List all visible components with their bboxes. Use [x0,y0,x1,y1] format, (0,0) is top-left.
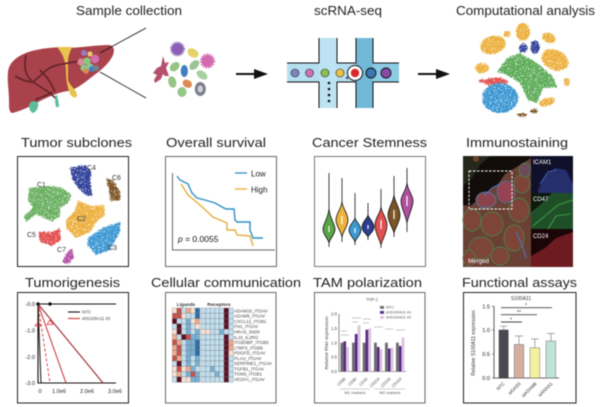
panel: cancer stemness violin plot [314,156,426,266]
panel: tumor subclones tSNE: C7 [57,247,66,254]
panel: cellular communication heatmap: SERPINE1_ITGAV [234,361,272,366]
panel: cellular communication heatmap: HRAS_INSR [234,330,261,334]
chart: overview tSNE [475,23,572,117]
panel: TAM polarization bar chart: CD163 [390,376,403,389]
panel: cellular communication heatmap: CXCL12_ITGB1 [234,319,267,324]
dashed inset box [469,171,512,209]
panel: functional assays bar chart: Relative S100A11 expression [471,310,477,376]
panel: functional assays bar chart [464,292,576,403]
panel: TAM polarization bar chart: shS100A11 #2 [386,314,411,320]
title: Immunostaining: Immunostaining [466,135,568,150]
panel: TAM polarization bar chart: 1.0 [331,340,338,346]
panel: tumor subclones tSNE: C6 [112,175,121,182]
panel: TAM polarization bar chart: THP-1 [366,297,379,302]
panel: TAM polarization bar chart: 1.5 [331,326,338,331]
panel: tumorigenesis limiting dilution chart: -0.0 [25,302,35,308]
panel: cellular communication heatmap: TGM2_ITGB1 [234,372,263,377]
panel: tumor subclones tSNE: C4 [87,165,96,172]
panel: overall survival chart: Low [251,170,266,178]
panel: TAM polarization bar chart: CD206 [379,376,392,389]
title: Cellular communication: Cellular communication [151,275,301,290]
panel: functional assays bar chart: S100A11 [511,296,531,302]
panel: TAM polarization bar chart: M1 markers [344,390,366,395]
panel: functional assays bar chart: siGAS6 [507,381,522,396]
panel: functional assays bar chart: * [510,318,512,324]
title: TAM polarization: TAM polarization [313,275,422,290]
panel: immunostaining micrographs: Merged [468,258,490,265]
panel: functional assays bar chart: 1.5 [482,304,490,310]
panel: TAM polarization bar chart: CD86 [336,376,347,387]
icon: liver with tumour [8,45,114,113]
panel: ICAM1: ICAM1 [533,160,552,166]
panel: cellular communication heatmap: Ligands [177,302,196,308]
panel: cellular communication heatmap: Receptors [207,302,231,308]
panel: TAM polarization bar chart: 0.0 [331,369,338,374]
panel: tumor subclones tSNE: C5 [27,232,36,239]
panel: overall survival chart: p = 0.0055 [177,234,219,244]
panel: functional assays bar chart: siADAM8 [521,381,538,398]
panel: TAM polarization bar chart [314,292,425,403]
panel: functional assays bar chart: * [525,303,527,309]
panel: tumor subclones tSNE: C2 [77,216,86,223]
panel: functional assays bar chart: siANXA1 [537,381,554,398]
title: Cancer Stemness: Cancer Stemness [312,135,428,150]
panel: immunostaining micrographs [463,156,573,267]
panel: tumorigenesis limiting dilution chart [18,292,128,403]
panel: tumorigenesis limiting dilution chart: NTC [82,310,91,314]
panel: tumorigenesis limiting dilution chart: 1.0e6 [52,389,66,395]
panel: cellular communication heatmap: TGFB1_ITGAV [234,366,264,371]
panel: cellular communication heatmap [166,292,276,403]
curve: high expression [181,184,253,246]
panel: TAM polarization bar chart: Relative RNA expression [324,316,330,370]
panel: cellular communication heatmap: ITGB3BP_ITGB5 [234,340,269,345]
panel: tumorigenesis limiting dilution chart: -3.0 [25,381,35,387]
title: Tumorigenesis: Tumorigenesis [25,275,121,290]
title: Sample collection: Sample collection [76,3,182,18]
panel: tumor subclones tSNE [18,156,128,266]
panel: cellular communication heatmap: PLAU_ITGAV [234,356,261,361]
panel: cellular communication heatmap: IL15_IL2RG [234,335,259,340]
panel: TAM polarization bar chart: CD204 [368,376,381,389]
panel: cellular communication heatmap: ADAM15_ITGAV [234,308,268,313]
panel: TAM polarization bar chart: NTC [386,304,394,310]
panel: cellular communication heatmap: VEGFA_ITGAV [234,377,265,382]
panel: functional assays bar chart: NTC [495,381,506,391]
panel: overall survival chart [166,156,276,266]
title: Computational analysis: Computational analysis [456,3,596,18]
title: Overall survival: Overall survival [166,135,266,150]
panel: functional assays bar chart: 0.0 [482,376,490,382]
panel: tumorigenesis limiting dilution chart: shS100A11 #2 [82,316,111,321]
panel: tumor subclones tSNE: C3 [108,245,117,252]
panel: CD24: CD24 [533,234,549,240]
panel: tumor subclones tSNE: C1 [37,182,46,189]
panel: tumorigenesis limiting dilution chart: -2.0 [25,355,35,361]
panel: cellular communication heatmap: FN1_ITGAV [234,324,258,329]
panel: tumorigenesis limiting dilution chart: -1.0 [25,328,35,334]
panel: TAM polarization bar chart: shS100A11 #1 [386,310,411,314]
panel: CD47: CD47 [533,197,549,203]
title: Functional assays: Functional assays [462,275,578,290]
panel: cellular communication heatmap: LTBP3_ITGB5 [234,345,263,350]
title: Tumor subclones: Tumor subclones [21,135,133,150]
panel: tumorigenesis limiting dilution chart: 3.0e6 [108,389,122,395]
panel: TAM polarization bar chart: CD40 [358,376,369,387]
curve: low expression [177,176,263,238]
panel: overall survival chart: High [251,186,267,194]
title: scRNA-seq: scRNA-seq [314,3,382,18]
arrow: to scRNA-seq [236,69,268,79]
panel: TAM polarization bar chart: CD80 [347,376,358,387]
panel: TAM polarization bar chart: 2.0 [331,312,338,316]
panel: tumorigenesis limiting dilution chart: 2.0e6 [80,389,94,395]
panel: TAM polarization bar chart: M2 markers [379,390,401,395]
panel: tumorigenesis limiting dilution chart: 0 [38,389,42,395]
icon: microfluidic droplet channel [287,38,399,108]
panel: cellular communication heatmap: ADAM9_ITGAV [234,314,265,319]
zoom lines [100,28,146,98]
panel: cellular communication heatmap: PDGFD_ITGAV [234,351,265,356]
panel: TAM polarization bar chart: 0.5 [331,354,338,360]
panel: functional assays bar chart: 0.5 [482,352,490,358]
icon: dissociated cells [153,42,214,97]
panel: functional assays bar chart: ** [517,310,521,316]
arrow: to computational analysis [418,69,450,79]
panel: functional assays bar chart: 1.0 [482,328,490,334]
